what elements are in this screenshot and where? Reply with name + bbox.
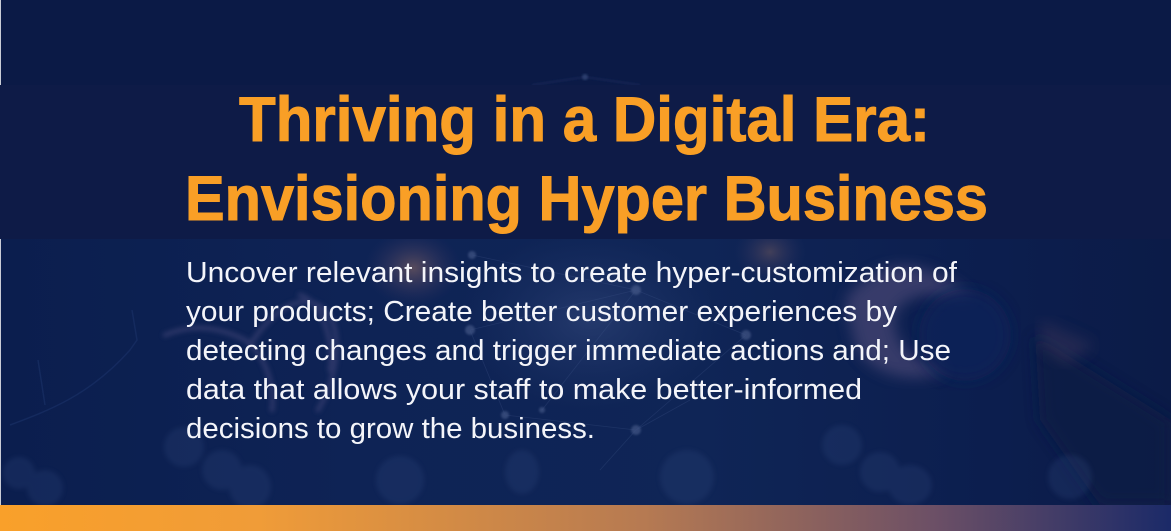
title: Thriving in a Digital Era: [239,85,930,155]
title [185,85,988,234]
right hand shape [845,266,975,378]
dark right sleeve [1035,335,1171,505]
body text: detecting changes and trigger immediate actions and; Use [186,335,951,367]
body text: data that allows your staff to make better-informed [186,374,862,406]
left hand outline [165,295,336,410]
title: Envisioning Hyper Business [185,164,988,234]
bottom gradient bar [0,505,1171,531]
lower photo background panel [0,222,1171,509]
network glow [460,230,720,410]
bokeh circles [3,425,1092,509]
body text: decisions to grow the business. [186,413,595,445]
title band [0,85,1171,239]
body text [186,257,957,445]
network nodes [465,251,751,435]
dark sphere [919,289,1011,381]
warm glow left [365,230,461,306]
body text: your products; Create better customer experiences by [186,296,898,328]
top background panel [0,0,1171,85]
body text: Uncover relevant insights to create hyper-customization of [186,257,957,289]
warm glow right [734,222,806,282]
left wrist lines [10,310,137,425]
